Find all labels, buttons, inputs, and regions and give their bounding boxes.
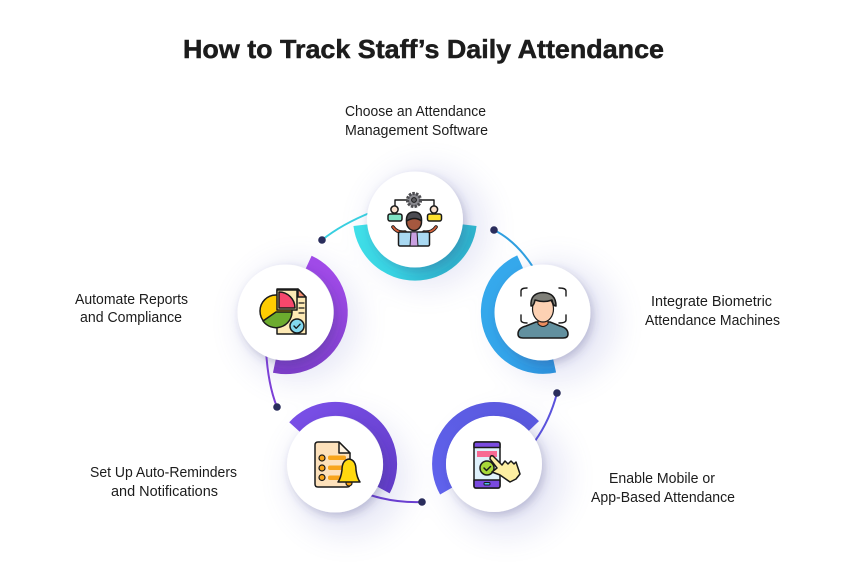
connector: right [490,226,533,267]
icon: manager with gear and team [388,194,442,246]
label: reports [75,292,188,326]
connector: lower left [370,495,426,506]
connector: lower right [535,389,561,441]
label: reminders: and Notifications [111,484,218,500]
white circle [494,264,590,360]
label: reports: and Compliance [80,310,182,326]
node: reminders [287,409,426,512]
label: reminders [90,465,237,500]
label: reminders: Set Up Auto-Reminders [90,465,237,481]
white circle [446,416,542,512]
arc: indigo [439,409,534,491]
connector: top [318,212,372,244]
label: choose software [345,104,488,139]
arc: teal [360,225,470,274]
label: mobile: App-Based Attendance [591,490,735,506]
node: biometric [488,226,590,367]
white circle [367,172,463,268]
label: mobile [591,471,735,506]
title: How to Track Staff’s Daily Attendance [183,34,664,64]
label: choose software: Management Software [345,123,488,139]
icon: checklist with bell [315,442,360,487]
label: reports: Automate Reports [75,292,188,308]
label: mobile: Enable Mobile or [609,471,715,487]
arc: blue [488,262,555,367]
connector: left [266,350,281,411]
label: biometric [645,294,780,329]
icon: face scan [518,288,568,338]
node: reports [238,262,341,411]
white circle [287,416,383,512]
label: biometric: Attendance Machines [645,313,780,329]
label: choose software: Choose an Attendance [345,104,486,120]
arc: purple [274,262,341,367]
soft shadows behind nodes [239,168,616,536]
node: choose software [318,172,470,274]
label: biometric: Integrate Biometric [651,294,772,310]
icon: report with pie chart [260,289,306,334]
white circle [238,264,334,360]
node: mobile [439,389,561,512]
icon: phone with tap [474,442,520,488]
arc: violet [294,409,390,490]
